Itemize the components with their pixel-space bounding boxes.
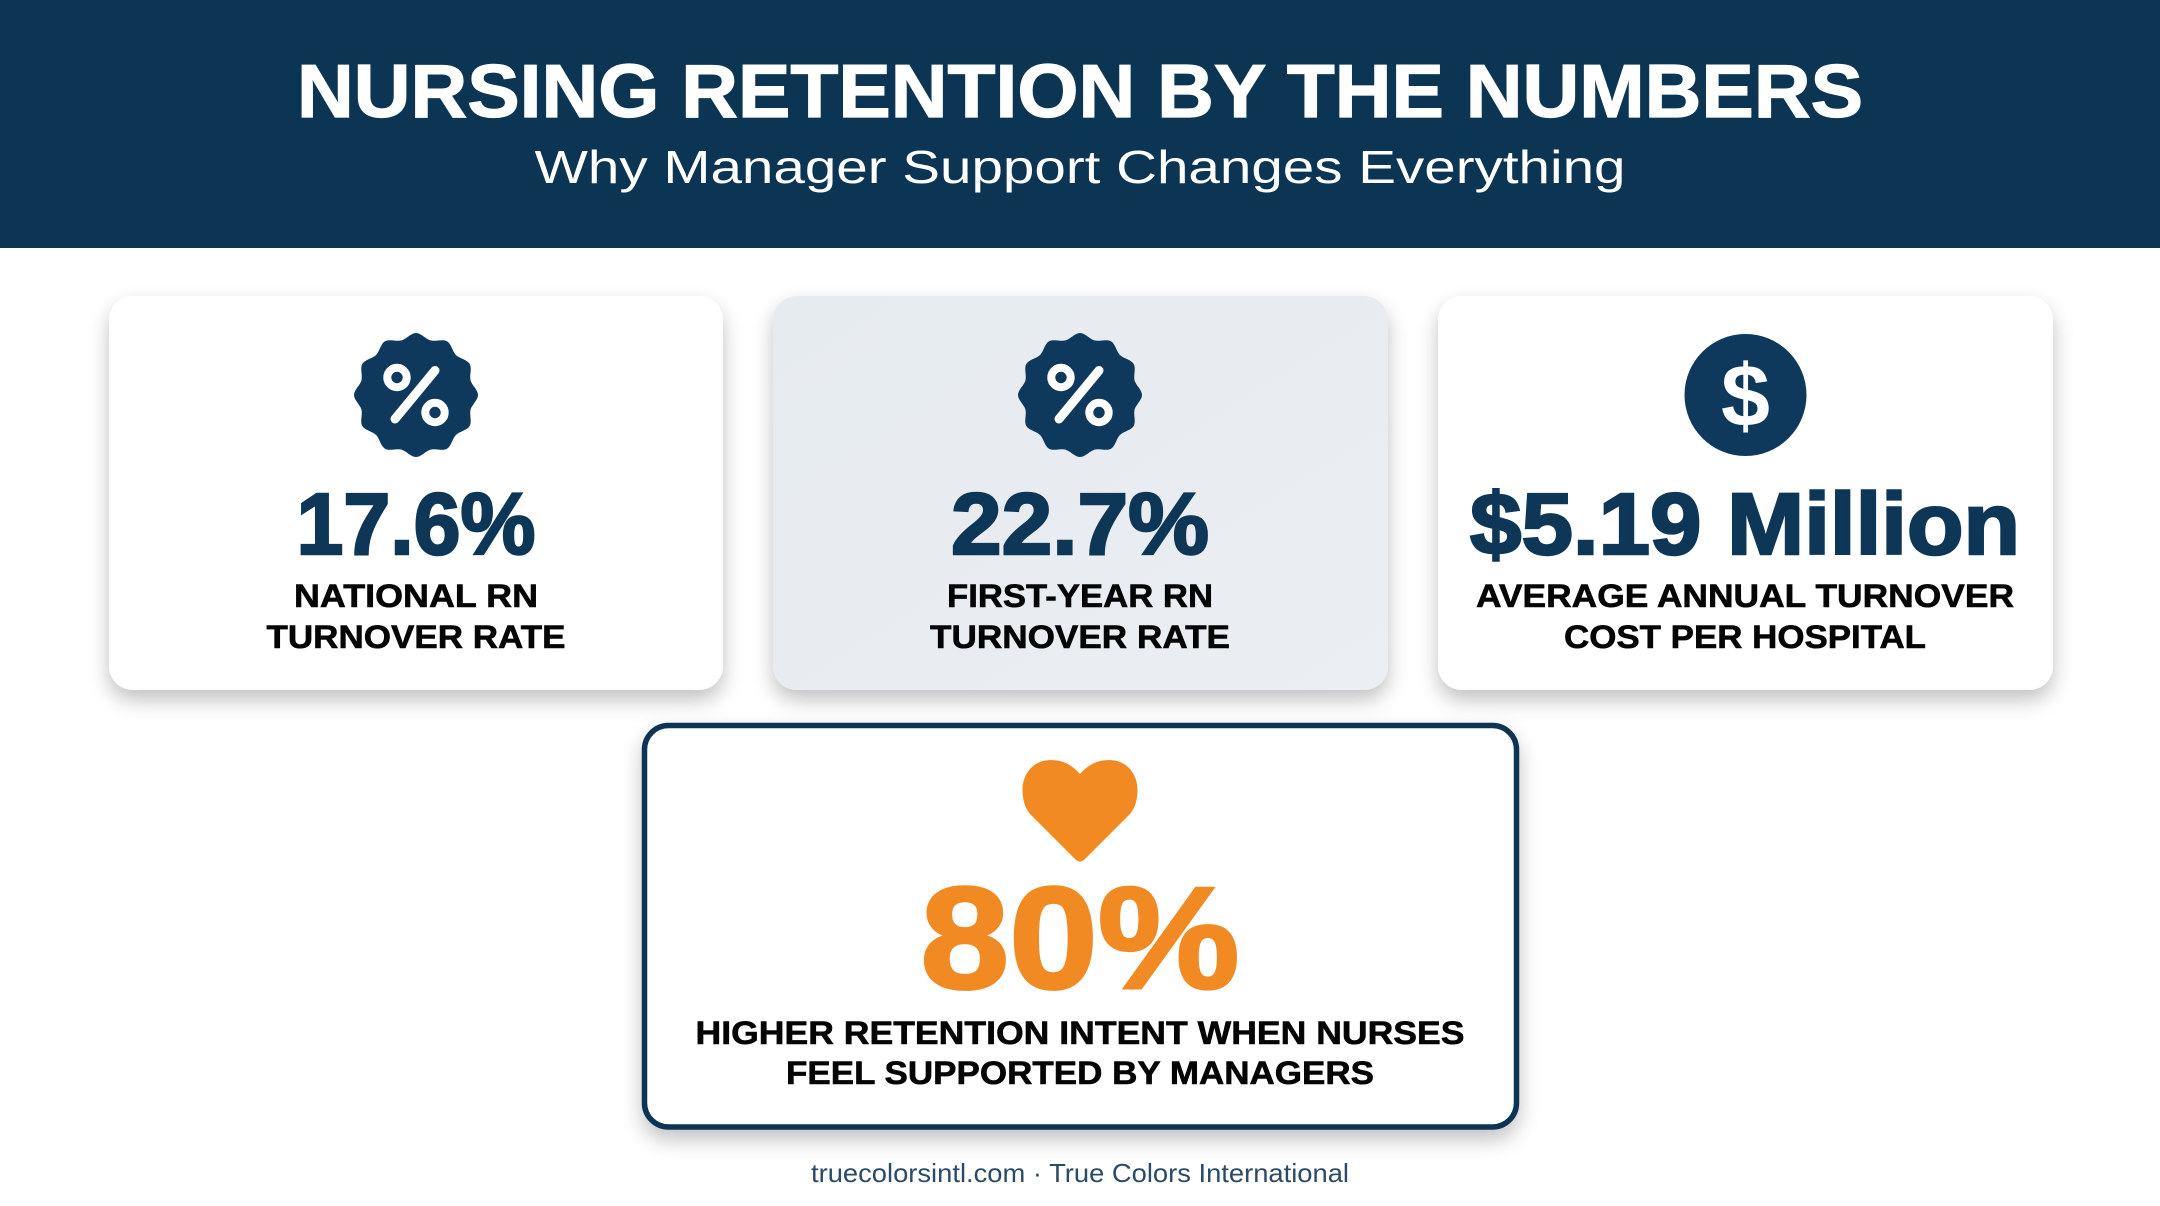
footer source: truecolorsintl.com · True Colors International	[811, 1158, 1349, 1188]
stat: 22.7%: 22.7%	[951, 476, 1209, 573]
label: higher retention intent: HIGHER RETENTION INTENT WHEN NURSES	[696, 1015, 1464, 1051]
label: first-year RN turnover rate: TURNOVER RATE	[930, 619, 1230, 655]
label: higher retention intent: FEEL SUPPORTED BY MANAGERS	[786, 1055, 1374, 1091]
label: average annual turnover cost per hospital	[1476, 578, 2014, 655]
panel: average annual turnover cost	[1438, 296, 2053, 690]
stat: $5.19 Million: $5.19 Million	[1470, 476, 2020, 573]
panel: first-year RN turnover rate	[773, 296, 1388, 690]
label: first-year RN turnover rate	[930, 578, 1230, 655]
stat: 17.6%: 17.6%	[296, 476, 536, 573]
icon: dollar coin	[1684, 334, 1806, 456]
label: average annual turnover cost per hospital: AVERAGE ANNUAL TURNOVER	[1476, 578, 2014, 614]
label: national RN turnover rate: NATIONAL RN	[294, 578, 538, 614]
icon: dollar coin: $	[1721, 346, 1770, 445]
icon: percent badge	[354, 333, 478, 457]
icon: heart	[1022, 760, 1138, 862]
label: average annual turnover cost per hospital: COST PER HOSPITAL	[1564, 619, 1926, 655]
panel: manager support highlight	[644, 726, 1516, 1127]
label: national RN turnover rate: TURNOVER RATE	[266, 619, 566, 655]
subtitle: Why Manager Support Changes Everything	[534, 141, 1626, 193]
title: NURSING RETENTION BY THE NUMBERS	[297, 49, 1863, 133]
panel: national RN turnover rate	[109, 296, 723, 690]
icon: percent badge	[1018, 333, 1142, 457]
label: national RN turnover rate	[266, 578, 566, 655]
label: first-year RN turnover rate: FIRST-YEAR RN	[947, 578, 1213, 614]
header banner	[0, 0, 2160, 248]
label: higher retention intent	[696, 1015, 1464, 1091]
stat: 80%: 80%	[920, 857, 1240, 1019]
